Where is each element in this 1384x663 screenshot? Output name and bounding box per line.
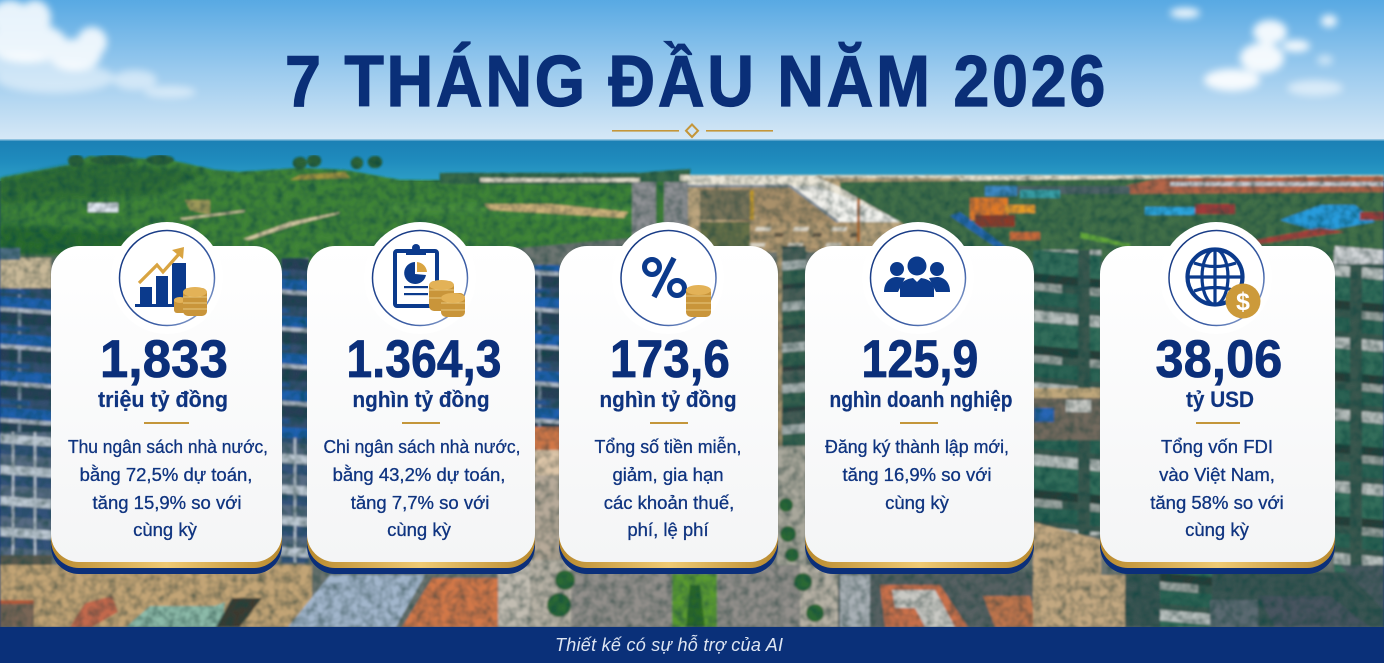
water slides — [970, 198, 1008, 220]
footer credit: Thiết kế có sự hỗ trợ của AI — [555, 635, 783, 655]
description: giảm, gia hạn — [612, 464, 724, 485]
description: Chi ngân sách nhà nước, — [324, 436, 520, 457]
title divider with diamond — [612, 124, 773, 137]
stat value: 1.364,3 — [346, 330, 502, 389]
description: cùng kỳ — [885, 492, 950, 513]
description: cùng kỳ — [1185, 519, 1250, 540]
description: Tổng vốn FDI — [1161, 436, 1273, 457]
stat unit: triệu tỷ đồng — [98, 387, 228, 412]
construction site — [688, 178, 960, 252]
sea — [0, 139, 1384, 181]
shoreline trees — [68, 155, 382, 169]
icon: rising bar chart with coins — [120, 230, 214, 326]
palm line — [440, 169, 690, 185]
stat value: 1,833 — [100, 330, 228, 389]
bottom sand left — [0, 565, 312, 627]
left forest — [0, 156, 640, 272]
description: tăng 16,9% so với — [843, 464, 991, 485]
beach — [680, 175, 1384, 181]
description: cùng kỳ — [387, 519, 452, 540]
icon: globe with dollar coin — [1169, 230, 1264, 326]
stat unit: nghìn doanh nghiệp — [830, 387, 1012, 412]
description — [594, 436, 742, 540]
sky — [0, 0, 1384, 140]
stat unit: nghìn tỷ đồng — [600, 387, 736, 412]
bottom houses — [838, 572, 1034, 627]
description — [1150, 436, 1284, 540]
description: vào Việt Nam, — [1159, 464, 1275, 485]
central road — [632, 182, 657, 242]
description — [68, 436, 268, 540]
description — [324, 436, 520, 540]
title: 7 THÁNG ĐẦU NĂM 2026 — [285, 41, 1108, 122]
description: tăng 15,9% so với — [93, 492, 241, 513]
description: cùng kỳ — [133, 519, 198, 540]
description: Đăng ký thành lập mới, — [825, 436, 1009, 457]
waterpark — [840, 176, 1384, 262]
description: Thu ngân sách nhà nước, — [68, 436, 268, 457]
stat unit: tỷ USD — [1186, 387, 1254, 412]
description — [825, 436, 1009, 513]
mid-ground base — [0, 232, 1384, 628]
description: Tổng số tiền miễn, — [594, 436, 742, 457]
icon: globe with dollar coin: $ — [1236, 288, 1250, 316]
stat value: 125,9 — [862, 330, 978, 389]
stat value: 38,06 — [1156, 330, 1282, 389]
stat value: 173,6 — [610, 330, 730, 389]
mid buildings — [534, 265, 560, 427]
panel: card 2 chi ngân sách — [307, 222, 535, 574]
description: phí, lệ phí — [627, 519, 709, 540]
roofs — [288, 575, 425, 627]
panel: card 1 thu ngân sách — [51, 222, 282, 574]
panel: card 4 doanh nghiệp — [805, 222, 1034, 574]
footer band — [0, 627, 1384, 663]
description: tăng 58% so với — [1150, 492, 1284, 513]
description: bằng 72,5% dự toán, — [80, 464, 252, 485]
boulevard — [530, 560, 575, 627]
icon: clipboard with pie chart and coins — [372, 230, 468, 326]
description: bằng 43,2% dự toán, — [333, 464, 505, 485]
road lanes and median — [571, 565, 672, 627]
clouds — [0, 0, 1343, 98]
stat unit: nghìn tỷ đồng — [352, 387, 490, 412]
description: tăng 7,7% so với — [351, 492, 489, 513]
panel: card 5 FDI — [1100, 222, 1335, 574]
panel: card 3 miễn giảm thuế — [559, 222, 778, 574]
left blue buildings — [0, 258, 51, 288]
icon: group of people — [870, 230, 966, 326]
description: các khoản thuế, — [604, 492, 734, 513]
icon: percent with coins — [621, 230, 716, 326]
